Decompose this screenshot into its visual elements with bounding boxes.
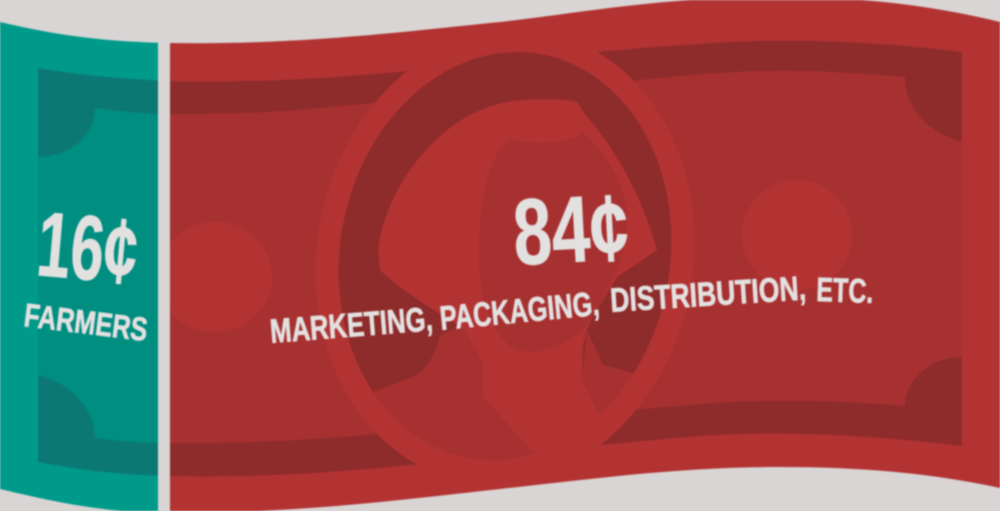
medallion outer ring xyxy=(316,52,694,465)
right seal circle xyxy=(742,180,852,290)
teal note base xyxy=(0,0,158,511)
portrait medallion xyxy=(316,52,694,465)
text: 16 cents: 16¢ xyxy=(33,193,142,304)
teal inner panel xyxy=(38,108,158,442)
bottom ornament band xyxy=(170,357,962,476)
teal bottom corner ornament xyxy=(38,375,170,476)
medallion dark ring xyxy=(338,52,672,454)
left seal circle xyxy=(170,222,272,332)
text: farmers: FARMERS xyxy=(22,296,150,348)
word: etc: ETC. xyxy=(816,271,874,311)
word: packaging: PACKAGING, xyxy=(438,285,601,338)
word: marketing: MARKETING, xyxy=(269,300,434,351)
portrait background and neck xyxy=(378,99,657,466)
top ornament band xyxy=(170,41,962,142)
word: distribution: DISTRIBUTION, xyxy=(609,269,807,320)
text: 84 cents: 84¢ xyxy=(511,174,631,285)
teal top corner ornament xyxy=(38,68,170,157)
portrait head xyxy=(479,132,627,352)
portrait right shoulder xyxy=(582,332,633,414)
portrait left shoulder xyxy=(374,328,534,460)
red inner panel xyxy=(170,72,962,442)
text: marketing, packaging, distribution, etc. xyxy=(269,269,874,351)
panel: farmers share xyxy=(0,21,159,511)
